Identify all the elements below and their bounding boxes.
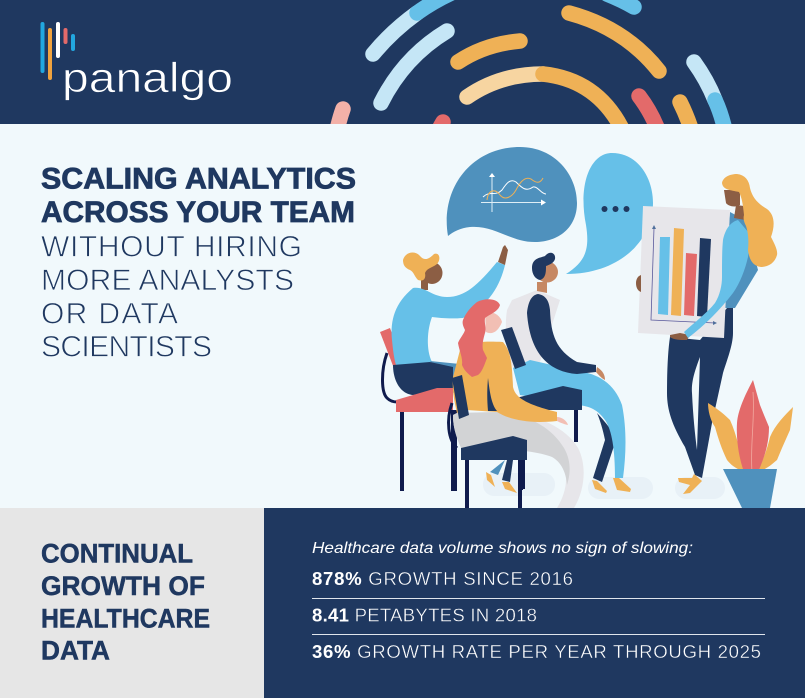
logo bars bbox=[42, 24, 73, 78]
person: seated woman left bbox=[380, 245, 520, 491]
person: seated woman front bbox=[449, 299, 584, 508]
main title: MORE ANALYSTS bbox=[41, 264, 294, 297]
logo: panalgo bbox=[42, 24, 233, 101]
main title: SCIENTISTS bbox=[41, 331, 212, 364]
intro text: Healthcare data volume shows no sign of slowing: bbox=[312, 540, 693, 557]
stat: 8.41: 8.41 PETABYTES IN 2018 bbox=[312, 605, 537, 626]
main title: ACROSS YOUR TEAM bbox=[41, 196, 355, 229]
panel: continual growth heading: DATA bbox=[41, 635, 110, 665]
mini line chart bbox=[481, 173, 546, 212]
stat: 878%: 878% GROWTH SINCE 2016 bbox=[312, 568, 573, 589]
speech bubble: dots bbox=[566, 153, 653, 274]
panel: healthcare data statistics bbox=[264, 508, 805, 698]
red chair bbox=[402, 410, 455, 491]
main title: SCALING ANALYTICS bbox=[41, 162, 356, 196]
person: standing woman with chart bbox=[636, 174, 777, 494]
floor shadows bbox=[483, 473, 725, 499]
panel: continual growth heading bbox=[0, 508, 264, 698]
potted plant bbox=[708, 380, 793, 508]
main title: OR DATA bbox=[41, 297, 178, 330]
stat: 36%: 36% GROWTH RATE PER YEAR THROUGH 2025 bbox=[312, 641, 761, 662]
logo wordmark: panalgo bbox=[62, 54, 233, 101]
front chair legs bbox=[453, 410, 521, 508]
main title bbox=[41, 162, 356, 364]
chair legs bbox=[523, 405, 576, 489]
speech bubble: line chart bbox=[447, 147, 577, 242]
header banner bbox=[0, 0, 805, 135]
chart board bbox=[638, 206, 730, 338]
main title: WITHOUT HIRING bbox=[41, 231, 302, 264]
panel: continual growth heading: GROWTH OF bbox=[41, 571, 205, 601]
panel: continual growth heading: HEALTHCARE bbox=[41, 603, 210, 633]
decorative arcs bbox=[336, 0, 726, 135]
panel: continual growth heading: CONTINUAL bbox=[41, 539, 193, 569]
person: seated man bbox=[488, 253, 631, 493]
